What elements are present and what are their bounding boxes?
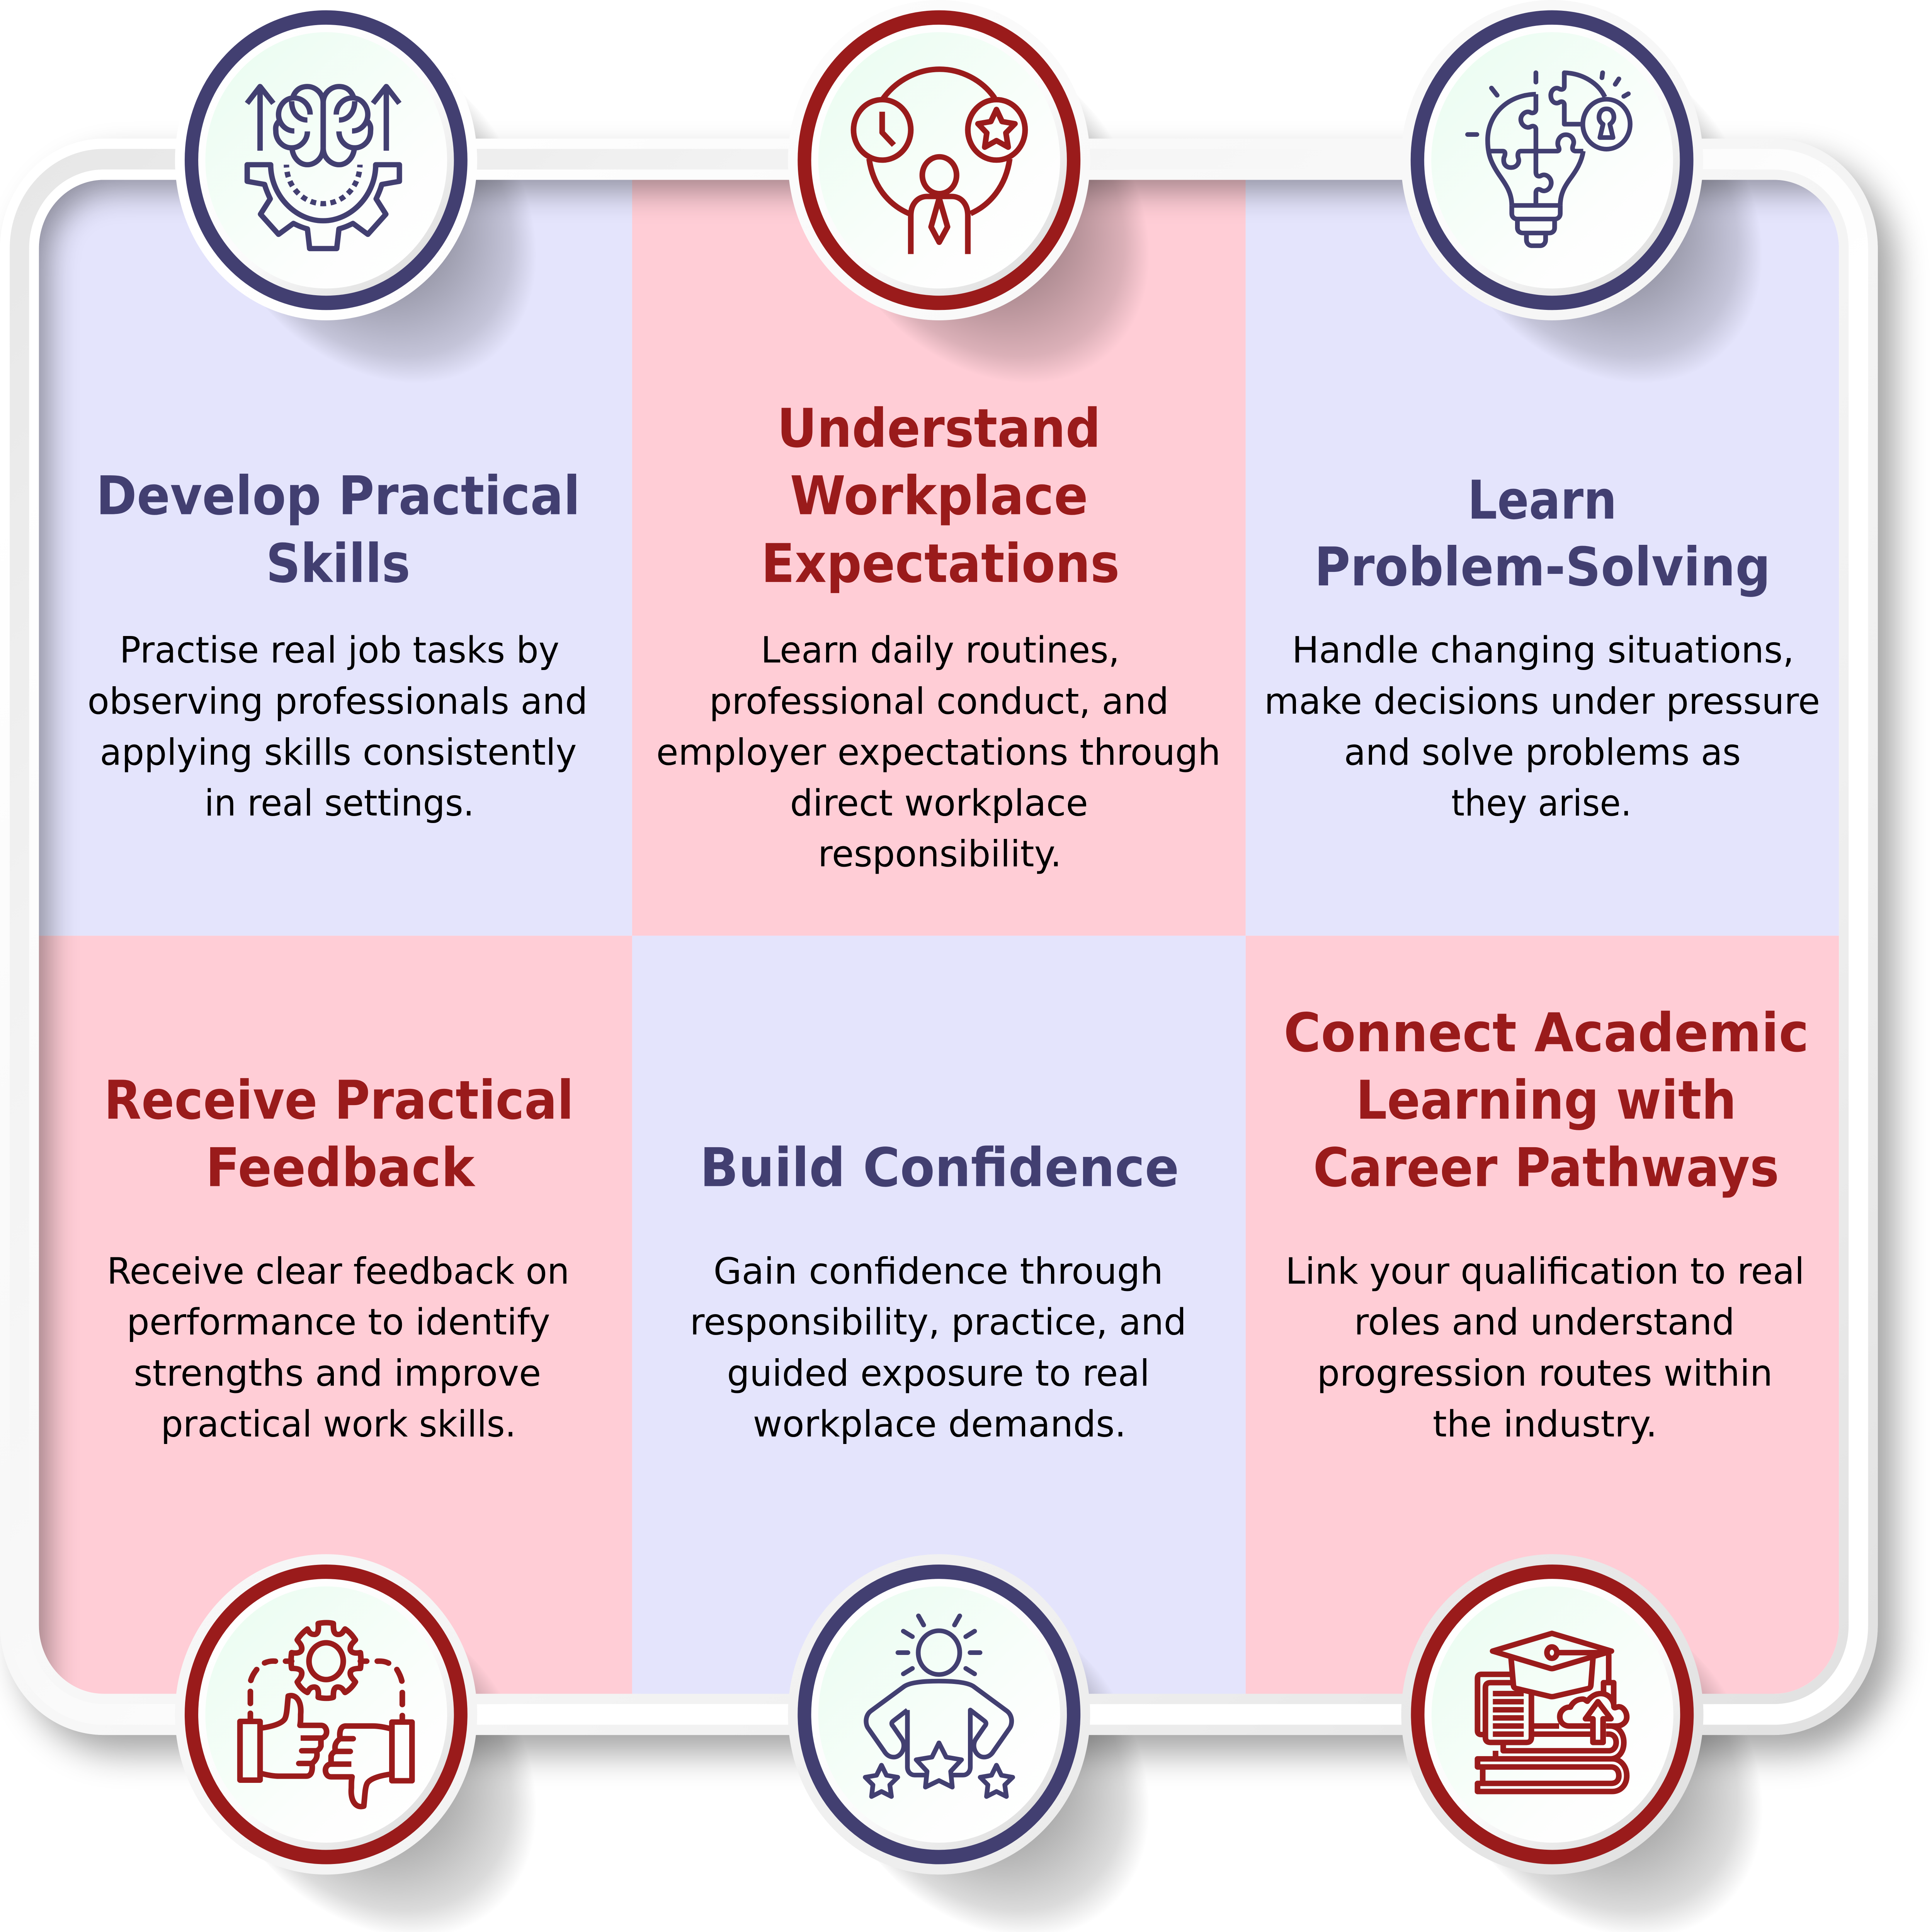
body text: understand workplace expectations: direct workplace <box>790 782 1088 824</box>
panel background: build confidence <box>632 936 1246 1694</box>
body text: learn problem-solving: they arise. <box>1451 782 1631 824</box>
icon: graduation cap, books and cloud <box>1478 1633 1627 1791</box>
heading: understand workplace expectations: Understand <box>777 397 1101 459</box>
panel grid <box>39 180 1839 1694</box>
heading: connect academic learning with career pathways <box>1284 1002 1809 1199</box>
icon: thumbs up and down with gear <box>240 1622 412 1806</box>
panel: develop practical skills text <box>87 464 588 824</box>
body text: connect academic learning: roles and understand <box>1354 1301 1735 1343</box>
heading: receive practical feedback: Receive Practical <box>104 1069 574 1131</box>
heading: learn problem-solving <box>1314 469 1770 598</box>
body text: understand workplace expectations: responsibility. <box>818 833 1061 875</box>
badge: brain and gear icon circle <box>175 0 477 320</box>
body text: receive practical feedback: strengths and improve <box>134 1352 541 1395</box>
body text: understand workplace expectations: Learn daily routines, <box>761 629 1120 671</box>
body text: understand workplace expectations <box>656 629 1221 875</box>
badge: graduation books icon circle <box>1401 1554 1703 1874</box>
badge: workplace person icon circle <box>788 0 1090 320</box>
panel background: connect academic learning <box>1246 936 1839 1694</box>
badge: puzzle bulb icon circle <box>1401 0 1703 320</box>
body text: learn problem-solving: Handle changing situations, <box>1292 629 1794 671</box>
body text: receive practical feedback: practical work skills. <box>161 1403 516 1445</box>
heading: understand workplace expectations: Workplace <box>790 464 1088 527</box>
panel: learn problem-solving text <box>1264 469 1820 824</box>
body text: develop practical skills: applying skills consistently <box>100 731 577 773</box>
heading: receive practical feedback <box>104 1069 574 1199</box>
panel background: receive practical feedback <box>39 936 632 1694</box>
body text: develop practical skills <box>87 629 588 824</box>
heading: connect academic learning with career pathways: Connect Academic <box>1284 1002 1809 1064</box>
body text: connect academic learning: the industry. <box>1433 1403 1657 1445</box>
icon: person with clock and star <box>854 69 1025 254</box>
body text: receive practical feedback <box>107 1250 570 1445</box>
body text: learn problem-solving <box>1264 629 1820 824</box>
body text: develop practical skills: observing professionals and <box>87 680 588 723</box>
heading: receive practical feedback: Feedback <box>206 1136 476 1199</box>
body text: build confidence: responsibility, practice, and <box>690 1301 1187 1343</box>
body text: build confidence: workplace demands. <box>753 1403 1126 1445</box>
heading: develop practical skills: Develop Practical <box>96 464 580 527</box>
body text: develop practical skills: in real settings. <box>204 782 474 824</box>
heading: connect academic learning with career pathways: Learning with <box>1356 1069 1736 1131</box>
panel: build confidence text <box>690 1136 1187 1445</box>
panel: connect academic learning text <box>1284 1002 1809 1445</box>
body text: receive practical feedback: performance to identify <box>127 1301 550 1343</box>
body text: understand workplace expectations: employer expectations through <box>656 731 1221 773</box>
body text: develop practical skills: Practise real job tasks by <box>119 629 560 671</box>
badge: feedback hands icon circle <box>175 1554 477 1874</box>
body text: learn problem-solving: make decisions under pressure <box>1264 680 1820 723</box>
body text: connect academic learning: Link your qualification to real <box>1286 1250 1804 1292</box>
panel background: understand workplace expectations <box>632 180 1246 936</box>
panel background: learn problem-solving <box>1246 180 1839 936</box>
body text: build confidence: Gain confidence through <box>713 1250 1163 1292</box>
heading: understand workplace expectations: Expectations <box>761 532 1120 595</box>
body text: understand workplace expectations: professional conduct, and <box>709 680 1169 723</box>
badge: confident person icon circle <box>788 1554 1090 1874</box>
body text: connect academic learning: progression routes within <box>1317 1352 1773 1395</box>
panel background: develop practical skills <box>39 180 632 936</box>
heading: connect academic learning with career pathways: Career Pathways <box>1313 1136 1779 1199</box>
panel: understand workplace expectations text <box>656 397 1221 875</box>
rounded frame rings <box>5 144 1873 1730</box>
heading: understand workplace expectations <box>761 397 1120 595</box>
panel: receive practical feedback text <box>104 1069 574 1445</box>
body text: connect academic learning <box>1286 1250 1804 1445</box>
heading: build confidence: Build Confidence <box>700 1136 1179 1199</box>
body text: build confidence: guided exposure to real <box>727 1352 1150 1395</box>
heading: develop practical skills: Skills <box>266 532 410 595</box>
body text: build confidence <box>690 1250 1187 1445</box>
body text: receive practical feedback: Receive clear feedback on <box>107 1250 570 1292</box>
heading: develop practical skills <box>96 464 580 595</box>
icon: puzzle light bulb with keyhole <box>1468 73 1630 246</box>
heading: learn problem-solving: Learn <box>1468 469 1617 531</box>
heading: learn problem-solving: Problem-Solving <box>1314 536 1770 598</box>
body text: learn problem-solving: and solve problems as <box>1344 731 1741 773</box>
icon: brain with arrows and gear <box>247 87 400 248</box>
icon: confident person with stars <box>865 1616 1013 1796</box>
